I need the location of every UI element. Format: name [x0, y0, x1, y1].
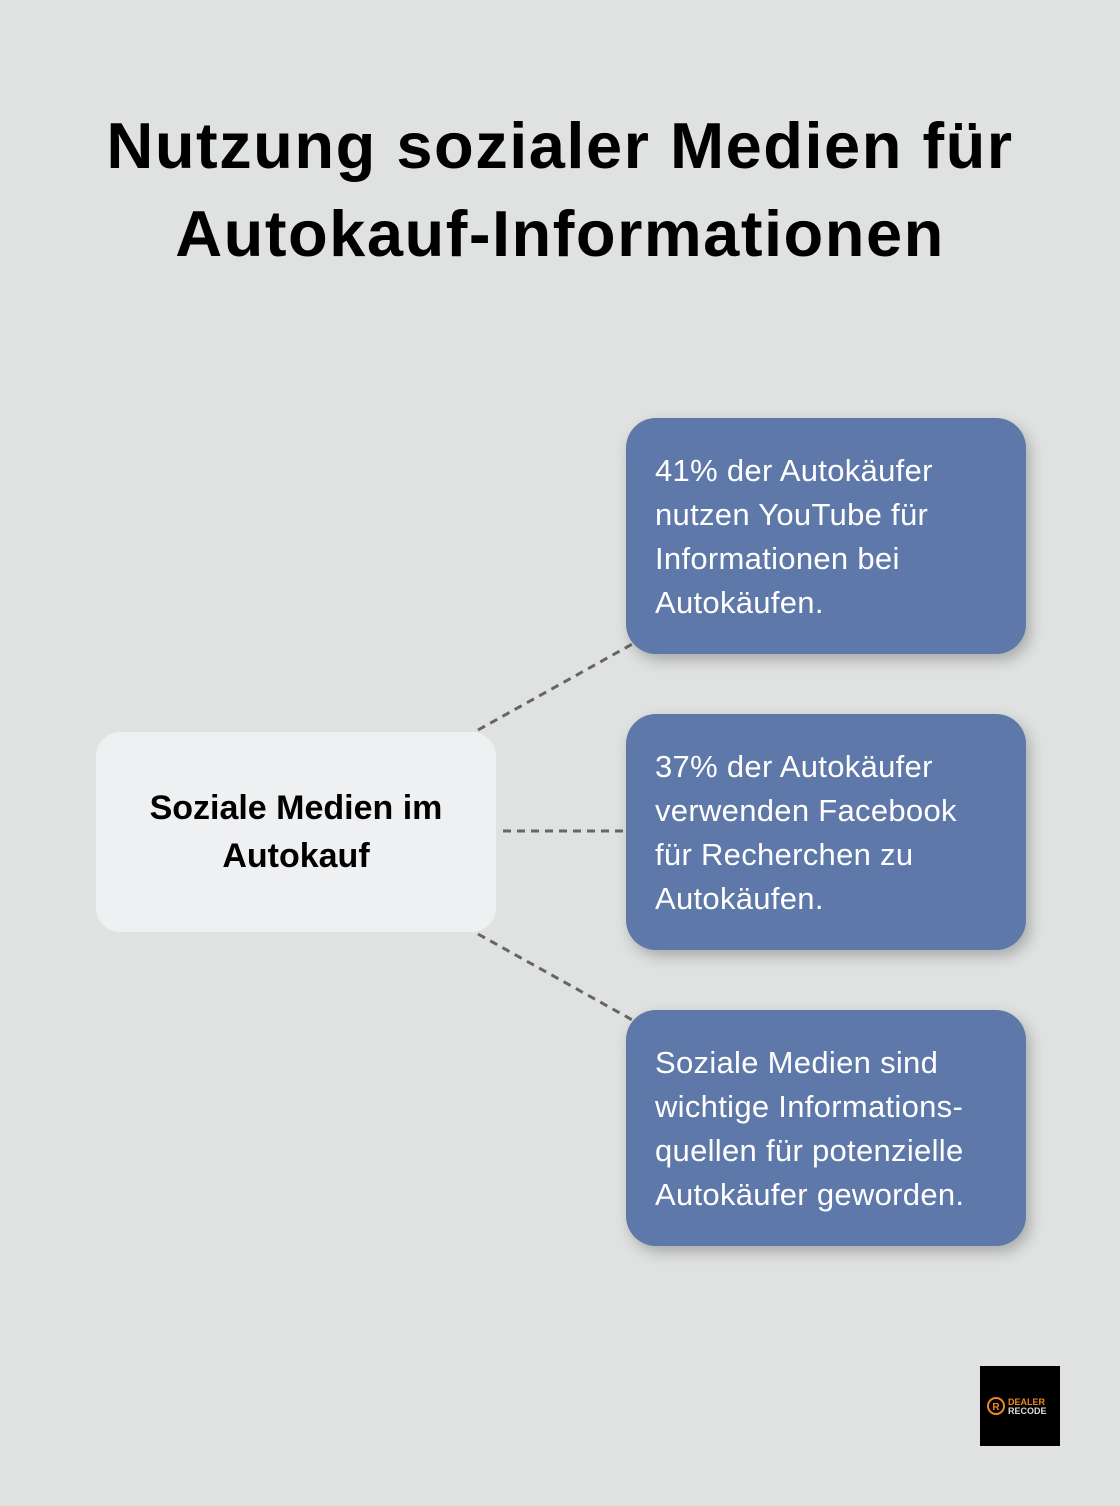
- center node: Autokauf: [222, 837, 370, 875]
- card: social media: Autokäufer geworden.: [655, 1177, 964, 1212]
- title: Nutzung sozialer Medien für: [106, 109, 1014, 182]
- card: facebook: Autokäufen.: [655, 881, 824, 916]
- logo: DEALER: [1008, 1397, 1046, 1407]
- card: facebook: 37% der Autokäufer: [655, 749, 933, 784]
- card: facebook: verwenden Facebook: [655, 793, 957, 828]
- logo: RECODE: [1008, 1406, 1047, 1416]
- card: youtube: [626, 418, 1026, 654]
- card: youtube: nutzen YouTube für: [655, 497, 928, 532]
- center node: [96, 732, 496, 932]
- card: youtube: Autokäufen.: [655, 585, 824, 620]
- card: youtube: 41% der Autokäufer: [655, 453, 933, 488]
- card: social media: Soziale Medien sind: [655, 1045, 938, 1080]
- center node: Soziale Medien im: [150, 789, 442, 827]
- card: facebook: für Recherchen zu: [655, 837, 913, 872]
- card: social media: [626, 1010, 1026, 1246]
- card: social media: wichtige Informations-: [655, 1089, 963, 1124]
- card: youtube: Informationen bei: [655, 541, 900, 576]
- logo: [980, 1366, 1060, 1446]
- logo: R: [992, 1402, 1000, 1413]
- title: Autokauf-Informationen: [175, 197, 945, 270]
- card: facebook: [626, 714, 1026, 950]
- card: social media: quellen für potenzielle: [655, 1133, 964, 1168]
- title: [106, 109, 1014, 270]
